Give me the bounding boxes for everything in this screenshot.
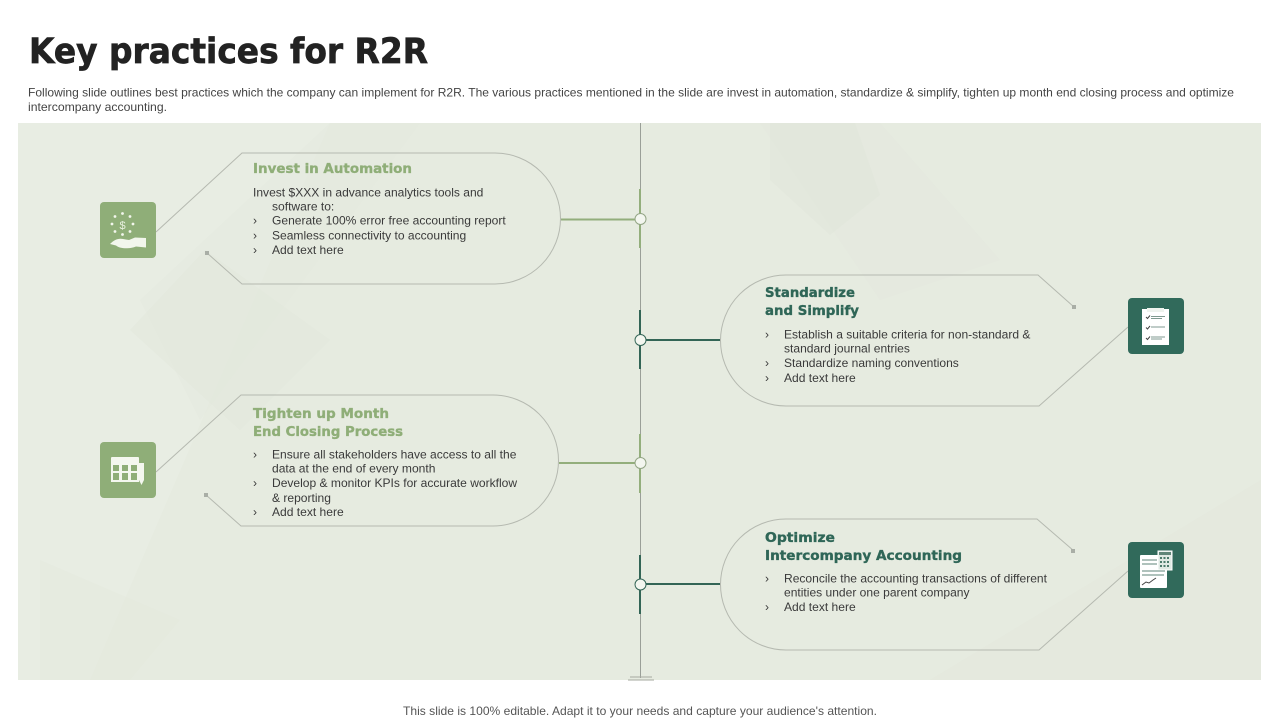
body text xyxy=(253,448,517,519)
panel: standardize and simplify xyxy=(635,275,1184,406)
icon: checklist clipboard xyxy=(1128,298,1184,354)
anchor dot xyxy=(204,493,208,497)
body text: standard journal entries xyxy=(784,342,910,356)
body text: & reporting xyxy=(272,491,331,505)
body text: data at the end of every month xyxy=(272,462,435,476)
body text: › xyxy=(765,600,769,614)
anchor dot xyxy=(1072,305,1076,309)
heading: Standardize xyxy=(765,285,855,301)
body text: › xyxy=(765,356,769,370)
heading: Optimize xyxy=(765,530,835,546)
footer note: This slide is 100% editable. Adapt it to your needs and capture your audience's attention. xyxy=(403,704,877,718)
heading: Invest in Automation xyxy=(253,161,412,177)
title: Key practices for R2R xyxy=(29,32,428,72)
background panel xyxy=(18,123,1261,680)
body text xyxy=(253,186,506,257)
body text: › xyxy=(765,371,769,385)
body text: Seamless connectivity to accounting xyxy=(272,228,466,242)
panel outline xyxy=(720,275,1128,406)
body text: entities under one parent company xyxy=(784,586,970,600)
subtitle description xyxy=(28,86,1234,114)
body text: › xyxy=(253,243,257,257)
subtitle description: intercompany accounting. xyxy=(28,100,167,114)
body text xyxy=(765,572,1048,614)
panel outline xyxy=(156,153,560,284)
body text xyxy=(765,328,1030,385)
body text: › xyxy=(765,572,769,586)
body text: Add text here xyxy=(784,600,856,614)
heading: Tighten up Month xyxy=(253,406,389,422)
subtitle description: Following slide outlines best practices which the company can implement for R2R. The various practices mentioned in the slide are invest in automation, standardize & simplify, tighten up month end closing process and optimize xyxy=(28,86,1234,100)
body text: › xyxy=(253,505,257,519)
heading: and Simplify xyxy=(765,303,859,319)
heading xyxy=(765,285,859,319)
body text: Develop & monitor KPIs for accurate workflow xyxy=(272,476,517,490)
body text: Add text here xyxy=(272,505,344,519)
body text: Standardize naming conventions xyxy=(784,356,959,370)
connector xyxy=(635,555,720,614)
panel outline xyxy=(156,395,559,526)
body text: Add text here xyxy=(784,371,856,385)
heading: Intercompany Accounting xyxy=(765,548,962,564)
panel: optimize intercompany accounting xyxy=(635,519,1184,650)
connector xyxy=(559,434,646,493)
body text: › xyxy=(253,476,257,490)
anchor dot xyxy=(205,251,209,255)
icon: hand with coins xyxy=(100,202,156,258)
icon: calendar xyxy=(100,442,156,498)
body text: Establish a suitable criteria for non-standard & xyxy=(784,328,1030,342)
panel: tighten up month end closing process xyxy=(100,395,646,526)
body text: Ensure all stakeholders have access to all the xyxy=(272,448,517,462)
heading: End Closing Process xyxy=(253,424,403,440)
heading xyxy=(765,530,962,564)
heading xyxy=(253,406,403,440)
connector xyxy=(561,189,646,248)
central timeline xyxy=(628,123,654,680)
body text: Invest $XXX in advance analytics tools and xyxy=(253,186,483,200)
body text: › xyxy=(765,328,769,342)
body text: Generate 100% error free accounting report xyxy=(272,214,506,228)
body text: › xyxy=(253,448,257,462)
body text: Reconcile the accounting transactions of different xyxy=(784,572,1048,586)
icon: calculator and report xyxy=(1128,542,1184,598)
connector xyxy=(635,310,720,369)
panel: invest in automation xyxy=(100,153,646,284)
icon: hand with coins: $ xyxy=(119,220,126,232)
panel outline xyxy=(720,519,1128,650)
anchor dot xyxy=(1071,549,1075,553)
body text: Add text here xyxy=(272,243,344,257)
body text: › xyxy=(253,228,257,242)
body text: software to: xyxy=(272,200,334,214)
body text: › xyxy=(253,214,257,228)
